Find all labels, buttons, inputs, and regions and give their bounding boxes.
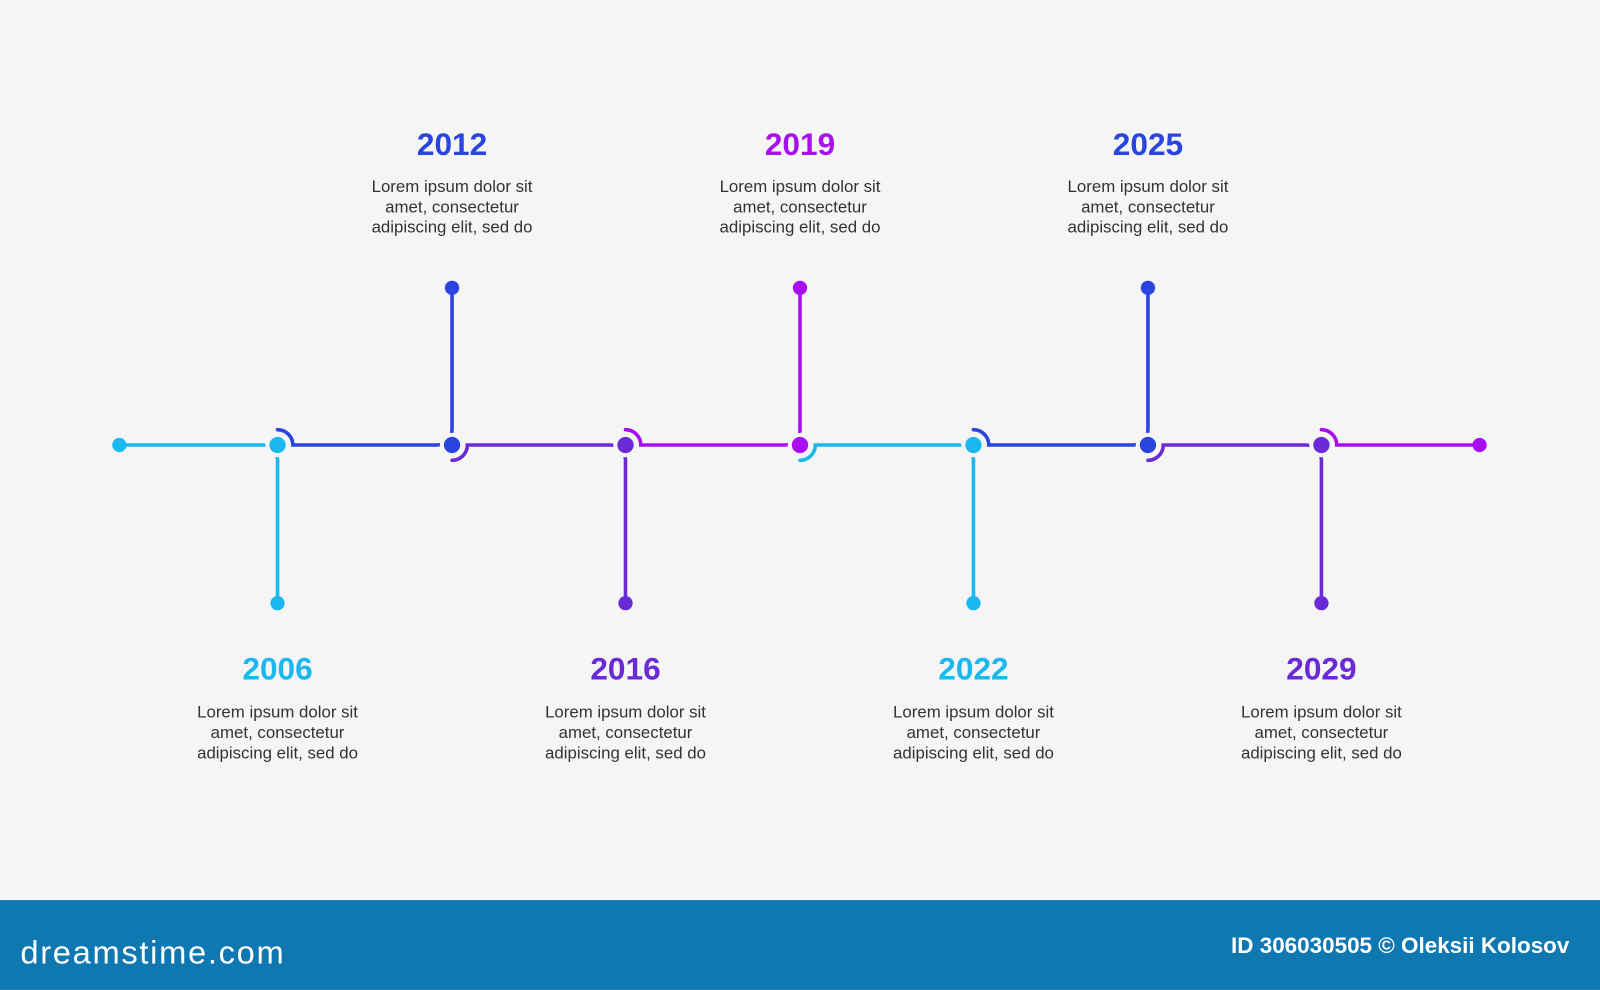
label 2012: Lorem ipsum dolor sit: [372, 177, 533, 196]
segment: 2016 to 2019: [626, 288, 800, 445]
label 2012: 2012: [417, 126, 487, 162]
label 2025: adipiscing elit, sed do: [1068, 218, 1228, 237]
label 2022: adipiscing elit, sed do: [893, 743, 1054, 762]
label 2006: [197, 651, 358, 762]
timeline: [119, 288, 1480, 603]
segment: 2006 to 2012: [278, 288, 452, 445]
segment: 2025 to 2029: [1148, 445, 1321, 603]
label 2019: amet, consectetur: [733, 197, 867, 216]
label 2029: amet, consectetur: [1255, 723, 1389, 742]
segment: start to 2006: [119, 445, 278, 603]
label 2016: Lorem ipsum dolor sit: [545, 702, 706, 721]
segment: 2019 to 2022: [800, 445, 973, 603]
label 2029: 2029: [1286, 651, 1357, 687]
label 2025: amet, consectetur: [1081, 197, 1215, 216]
label 2019: 2019: [765, 126, 835, 162]
label 2012: adipiscing elit, sed do: [372, 218, 532, 237]
label 2019: Lorem ipsum dolor sit: [720, 177, 881, 196]
label 2019: adipiscing elit, sed do: [720, 218, 880, 237]
label 2025: Lorem ipsum dolor sit: [1068, 177, 1229, 196]
footer banner: dreamstime.com: [20, 933, 284, 970]
label 2022: amet, consectetur: [907, 723, 1041, 742]
label 2006: adipiscing elit, sed do: [197, 743, 358, 762]
label 2016: adipiscing elit, sed do: [545, 743, 706, 762]
label 2022: [893, 651, 1054, 762]
label 2006: 2006: [242, 651, 313, 687]
label 2029: Lorem ipsum dolor sit: [1241, 702, 1402, 721]
segment: 2012 to 2016: [452, 445, 626, 603]
label 2029: adipiscing elit, sed do: [1241, 743, 1402, 762]
label 2029: [1241, 651, 1402, 762]
labels: [197, 126, 1402, 762]
footer banner: [0, 900, 1600, 990]
label 2019: [720, 126, 881, 237]
segment: 2022 to 2025: [973, 288, 1148, 445]
label 2025: 2025: [1113, 126, 1183, 162]
label 2016: amet, consectetur: [559, 723, 693, 742]
dots: [112, 281, 1487, 610]
segment: 2029 to end: [1321, 430, 1480, 445]
label 2016: 2016: [590, 651, 661, 687]
footer banner: ID 306030505 © Oleksii Kolosov: [1231, 933, 1570, 958]
label 2006: Lorem ipsum dolor sit: [197, 702, 358, 721]
label 2016: [545, 651, 706, 762]
label 2022: 2022: [938, 651, 1009, 687]
label 2022: Lorem ipsum dolor sit: [893, 702, 1054, 721]
label 2012: [372, 126, 533, 237]
label 2025: [1068, 126, 1229, 237]
label 2012: amet, consectetur: [385, 197, 519, 216]
label 2006: amet, consectetur: [211, 723, 345, 742]
